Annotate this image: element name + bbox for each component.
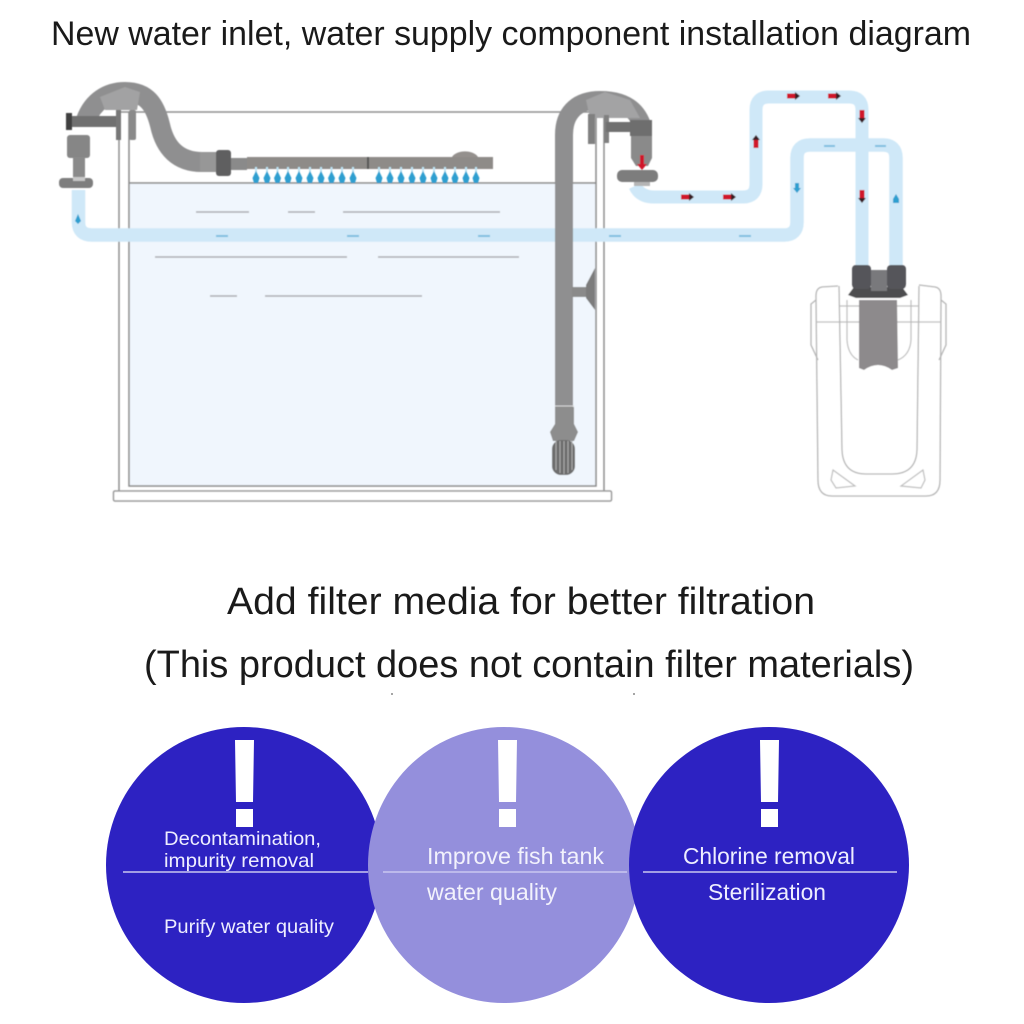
- diagram: aquarium water circulation: [59, 87, 946, 501]
- text: water quality label: Improve fish tank: [427, 843, 604, 869]
- outlet pipe with spray bar: [59, 87, 493, 188]
- circle: water quality: water quality: [426, 879, 557, 905]
- circle: decontamination: [106, 727, 382, 1003]
- circle: chlorine removal: [629, 727, 909, 1003]
- icon: exclamation mark: [760, 740, 779, 827]
- circle: chlorine removal: Sterilization: [708, 879, 826, 905]
- intake water tube: [635, 97, 862, 266]
- subheading: product note: (This product does not contain filter materials): [144, 644, 914, 686]
- return water tube: [78, 145, 896, 266]
- spray nozzles: [252, 167, 480, 183]
- blue flow arrows: [75, 183, 899, 224]
- water surface lines: [155, 212, 519, 296]
- icon: exclamation mark: [235, 740, 254, 827]
- aquarium tank: [114, 112, 612, 501]
- text: chlorine removal label: Chlorine removal: [683, 843, 855, 869]
- circle: decontamination: impurity removal: [164, 850, 314, 872]
- text: decontamination label: Decontamination,: [164, 828, 321, 850]
- icon: exclamation mark: [498, 740, 517, 827]
- heading: add filter media: Add filter media for better filtration: [227, 581, 815, 623]
- canister filter: [811, 265, 946, 496]
- title: New water inlet, water supply component installation diagram: [51, 15, 971, 53]
- red flow arrows: [681, 92, 866, 203]
- flow rate marks: [216, 145, 886, 237]
- intake pipe with strainer: [550, 92, 658, 475]
- circle: water quality: [368, 727, 640, 1003]
- circle: decontamination: Purify water quality: [164, 916, 334, 938]
